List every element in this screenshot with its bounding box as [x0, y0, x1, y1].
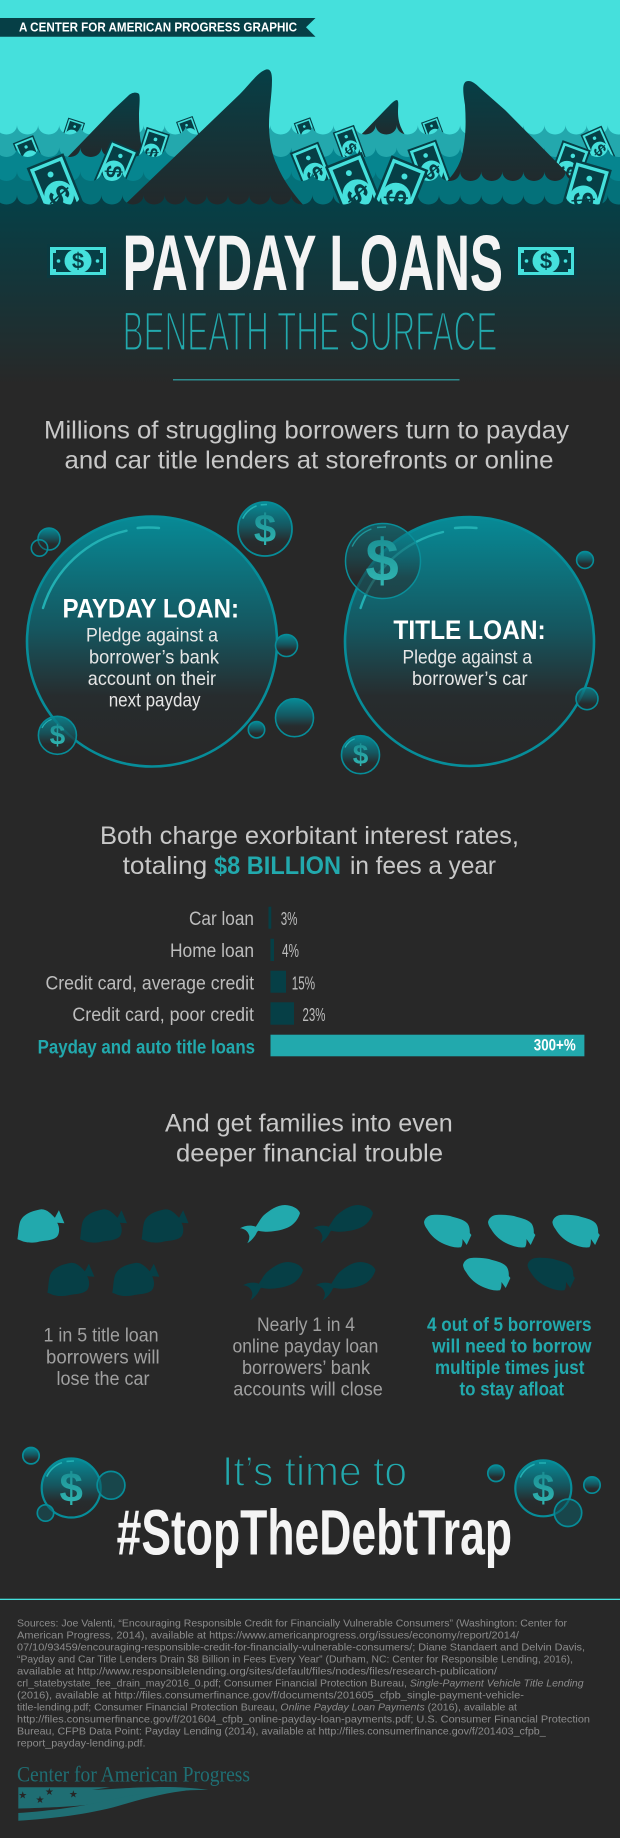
decorative bubbles around the loan panels — [31, 502, 598, 774]
footer rule — [0, 1599, 620, 1600]
logo stars — [18, 1787, 78, 1806]
stat: 1 in 5 title loan borrowers — [44, 1325, 160, 1390]
heading: payday loan: PAYDAY LOAN: — [62, 593, 239, 623]
icon: left title bill: $ — [72, 248, 84, 274]
stat: 4 out of 5 borrowers: will need to borrow — [431, 1336, 592, 1358]
bubble highlight — [361, 527, 476, 608]
bills: third row: $ — [418, 159, 446, 185]
bubbles: left of call to action: $ — [60, 1464, 83, 1511]
logo: Center for American Progress: Center for American Progress — [17, 1762, 250, 1787]
heading: fees: Both charge exorbitant interest rates, — [100, 822, 519, 850]
payday loan description: borrower’s bank — [89, 646, 219, 668]
intro text: Millions of struggling borrowers turn to payday — [44, 416, 570, 444]
fin: large center — [115, 69, 310, 214]
bar chart: interest rates — [38, 907, 584, 1058]
bubble highlight — [43, 527, 159, 608]
bubbles: left of call to action — [23, 1448, 125, 1521]
heading: financial trouble — [165, 1110, 453, 1168]
banner: a Center for American Progress graphic — [0, 18, 316, 37]
bills: third row: $ — [101, 165, 127, 179]
row: car loan — [189, 907, 297, 930]
row: car loan: Car loan — [189, 909, 254, 930]
payday loan description: next payday — [109, 690, 201, 712]
heading: fees: in fees a year — [350, 852, 496, 880]
sources: 07/10/93459/encouraging-responsible-credit-for-financially-vulnerable-consumers/; Diane Standaert and Delvin Davis, — [17, 1642, 585, 1654]
row: credit card, average credit: Credit card, average credit — [46, 973, 255, 994]
sources: title-lending.pdf; Consumer Financial Protection Bureau, Online Payday Loan Payments (2016), available at — [17, 1702, 517, 1714]
sources: “Payday and Car Title Lenders Drain $8 Billion in Fees Every Year” (Durham, NC: Center for Responsible Lending, 2016), — [17, 1654, 573, 1666]
bubbles: right of call to action — [488, 1460, 600, 1527]
sources: report_payday-lending.pdf. — [17, 1738, 146, 1750]
row: home loan: Home loan — [170, 941, 254, 962]
medium bubble: lower right of payday — [276, 699, 314, 737]
dollar bubble: top left of title loan — [346, 524, 420, 598]
logo flag swoosh — [18, 1787, 208, 1821]
row: home loan — [170, 939, 299, 962]
header ocean scene with shark fins and floating bills — [0, 0, 620, 390]
dollar bubble: top right of payday — [238, 502, 292, 556]
dollar bubble: lower left of payday: $ — [50, 720, 66, 750]
bills: third row — [91, 139, 591, 203]
sources: crl_statebystate_fee_drain_may2016_0.pdf; Consumer Financial Protection Bureau, Single-Payment Vehicle Title Lending — [17, 1678, 584, 1690]
bills: front row: $ — [339, 177, 375, 212]
heading: financial trouble: deeper financial trouble — [176, 1140, 443, 1168]
stat: 1 in 5 title loan borrowers: lose the car — [56, 1368, 150, 1390]
sources: available at http://www.responsiblelending.org/sites/default/files/nodes/files/research-publication/ — [17, 1666, 497, 1678]
dollar bubble: below title loan: $ — [353, 739, 369, 770]
stat: nearly 1 in 4 online payday loan borrowers — [232, 1314, 383, 1401]
stat: nearly 1 in 4 online payday loan borrowers: borrowers’ bank — [242, 1357, 370, 1379]
stat: nearly 1 in 4 online payday loan borrowers: online payday loan — [232, 1336, 378, 1358]
heading: financial trouble: And get families into even — [165, 1110, 453, 1138]
sources: American Progress, 2014), available at https://www.americanprogress.org/issues/economy/report/2014/ — [17, 1630, 519, 1642]
stat: 1 in 5 title loan borrowers: 1 in 5 title loan — [44, 1325, 159, 1347]
bills: second row: $ — [340, 139, 361, 159]
stat: 1 in 5 title loan borrowers: borrowers will — [46, 1346, 160, 1368]
dollar bubble: lower left of payday — [38, 716, 76, 754]
payday loan description: Pledge against a — [86, 625, 218, 647]
small bubble: lower right of payday — [248, 722, 265, 738]
row: credit card, poor credit: Credit card, poor credit — [72, 1005, 255, 1026]
row: credit card, average credit: 15% — [292, 973, 315, 993]
icon: left title bill — [47, 244, 109, 278]
banner: a Center for American Progress graphic: A CENTER FOR AMERICAN PROGRESS GRAPHIC — [19, 21, 297, 35]
heading: fees — [100, 822, 519, 880]
row: payday and auto title loans: Payday and auto title loans — [38, 1037, 255, 1058]
small bubble: right of title loan — [577, 552, 593, 568]
stat: nearly 1 in 4 online payday loan borrowers: accounts will close — [233, 1379, 383, 1401]
fin: large right — [438, 81, 590, 196]
sources: Sources: Joe Valenti, “Encouraging Responsible Credit for Financially Vulnerable Consumers” (Washington: Center for — [17, 1618, 567, 1630]
logo stars: ★ — [36, 1795, 45, 1806]
sources: (2016), available at http://files.consumerfinance.gov/f/documents/201605_cfpb_single-payment-vehicle- — [17, 1690, 525, 1702]
intro text: and car title lenders at storefronts or online — [64, 446, 554, 474]
intro text — [44, 416, 570, 474]
bills: third row: $ — [301, 161, 329, 188]
row: home loan: 4% — [282, 941, 299, 961]
dollar bubble: top left of title loan: $ — [365, 527, 399, 594]
small bubble: payday right edge — [276, 634, 298, 656]
bills: front row — [27, 152, 612, 235]
title loan description — [402, 646, 532, 690]
call to action: it's time to: It’s time to — [222, 1448, 407, 1495]
row: credit card, poor credit: 23% — [302, 1005, 325, 1025]
fin: small left — [60, 93, 150, 165]
title loan description: Pledge against a — [402, 646, 532, 668]
row: payday and auto title loans — [38, 1035, 584, 1058]
bills: second row — [13, 125, 618, 179]
bills: front row: $ — [41, 179, 77, 213]
icon: right title bill: $ — [540, 248, 552, 274]
bills: second row: $ — [141, 147, 162, 158]
panel: title loan bubble — [345, 517, 594, 766]
logo stars: ★ — [45, 1787, 54, 1798]
stat: nearly 1 in 4 online payday loan borrowers: Nearly 1 in 4 — [257, 1314, 355, 1336]
bills: front row: $ — [379, 189, 412, 207]
bills: top row — [59, 116, 448, 152]
payday loan description: account on their — [88, 668, 216, 690]
stat: 4 out of 5 borrowers: 4 out of 5 borrowers — [427, 1314, 592, 1336]
heading: title loan: TITLE LOAN: — [393, 615, 546, 645]
payday loan description — [86, 625, 219, 712]
panel: payday loan bubble — [27, 516, 277, 766]
bills: third row: $ — [554, 166, 579, 179]
dollar bubble: top right of payday: $ — [254, 507, 276, 551]
heading: fees: totaling — [123, 852, 207, 880]
fish group: 1 in 5 — [17, 1209, 189, 1296]
logo: Center for American Progress — [17, 1762, 250, 1821]
sources: Bureau, CFPB Data Point: Payday Lending (2014), available at http://files.consumerfinance.gov/f/201403_cfpb_ — [17, 1726, 546, 1738]
icon: right title bill — [515, 244, 577, 278]
stat: 4 out of 5 borrowers — [427, 1314, 592, 1401]
fish group: nearly 1 in 4 — [240, 1205, 376, 1300]
logo stars: ★ — [69, 1790, 78, 1800]
fin: small middle — [355, 100, 408, 141]
row: credit card, poor credit — [72, 1002, 325, 1026]
stat: 4 out of 5 borrowers: to stay afloat — [460, 1379, 564, 1401]
sources: http://files.consumerfinance.gov/f/201604_cfpb_online-payday-loan-payments.pdf; U.S. Consumer Financial Protection — [17, 1714, 590, 1726]
fish group: 4 out of 5 — [424, 1215, 600, 1290]
small bubble: title loan lower edge — [576, 688, 598, 710]
heading: fees: $8 BILLION — [214, 852, 341, 880]
title loan description: borrower’s car — [412, 668, 528, 690]
row: payday and auto title loans: 300+% — [534, 1036, 576, 1055]
bubbles: right of call to action: $ — [532, 1466, 554, 1510]
dollar bubble: below title loan — [342, 736, 380, 774]
bills: front row: $ — [566, 191, 599, 209]
sources — [17, 1618, 590, 1750]
stat: 4 out of 5 borrowers: multiple times just — [435, 1357, 585, 1379]
small bubbles: upper left — [31, 528, 60, 556]
row: car loan: 3% — [281, 909, 297, 929]
bills: second row: $ — [590, 140, 611, 161]
logo stars: ★ — [18, 1790, 27, 1802]
